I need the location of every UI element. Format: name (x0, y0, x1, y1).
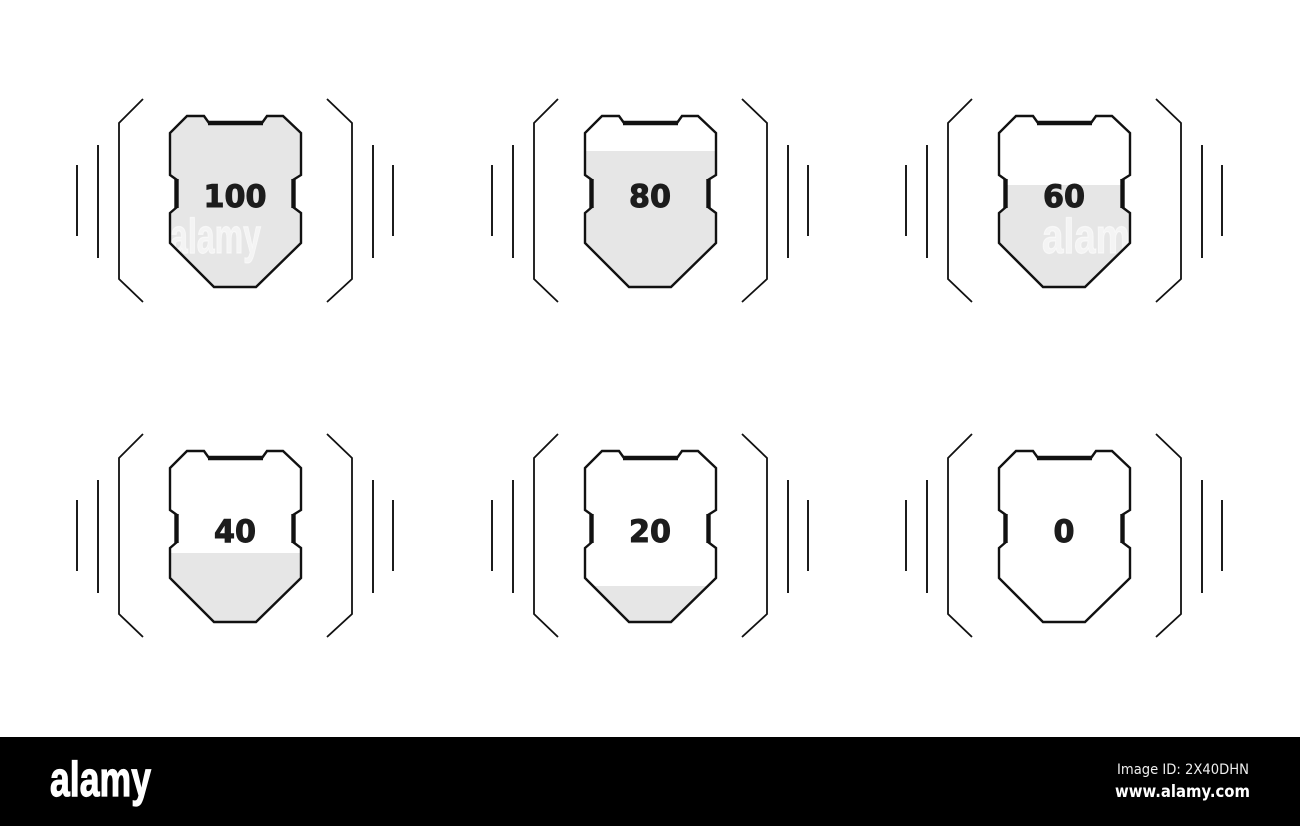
value 60: 60 (1043, 179, 1085, 215)
panel: shield 60 (906, 99, 1222, 302)
left bracket (534, 99, 558, 302)
panel: shield 20 (492, 434, 808, 637)
side lines (906, 145, 1222, 258)
shield thick accents (592, 458, 708, 543)
right bracket (742, 99, 767, 302)
side lines (906, 480, 1222, 593)
shield fill 80 percent (585, 151, 716, 287)
right bracket (327, 434, 352, 637)
shield outline (170, 116, 301, 287)
value 80: 80 (629, 179, 671, 215)
shield outline (999, 451, 1130, 622)
shield thick accents (176, 123, 294, 208)
right bracket (742, 434, 767, 637)
shield fill 60 percent (999, 185, 1130, 287)
shield outline (585, 116, 716, 287)
left bracket (948, 434, 972, 637)
value 100: 100 (204, 179, 266, 215)
shield fill 20 percent (593, 586, 708, 622)
right bracket (327, 99, 352, 302)
side lines (492, 480, 808, 593)
shield outline (999, 116, 1130, 287)
shield thick accents (176, 458, 294, 543)
value 40: 40 (214, 514, 256, 550)
shield fill 40 percent (170, 553, 301, 622)
side lines (492, 145, 808, 258)
footer bar (0, 737, 1300, 826)
panel: shield 0 (906, 434, 1222, 637)
panel: shield 80 (492, 99, 808, 302)
shield outline (170, 451, 301, 622)
shield outline (585, 451, 716, 622)
panel: shield 40 (77, 434, 393, 637)
shield thick accents (592, 123, 708, 208)
panel: shield 100 (77, 99, 393, 302)
image id: Image ID: 2X40DHN (1117, 762, 1249, 778)
right bracket (1156, 99, 1181, 302)
watermark on shield 60: alam (1042, 210, 1130, 264)
side lines (77, 480, 393, 593)
right bracket (1156, 434, 1181, 637)
left bracket (119, 434, 143, 637)
shield thick accents (1006, 458, 1122, 543)
shield fill 100 percent (170, 116, 301, 287)
watermark on shield 100: alamy (170, 210, 261, 264)
value 20: 20 (629, 514, 671, 550)
left bracket (119, 99, 143, 302)
value 0: 0 (1054, 514, 1074, 550)
left bracket (534, 434, 558, 637)
website: www.alamy.com (1115, 782, 1250, 801)
side lines (77, 145, 393, 258)
left bracket (948, 99, 972, 302)
footer logo: alamy (50, 753, 151, 807)
shield thick accents (1006, 123, 1122, 208)
